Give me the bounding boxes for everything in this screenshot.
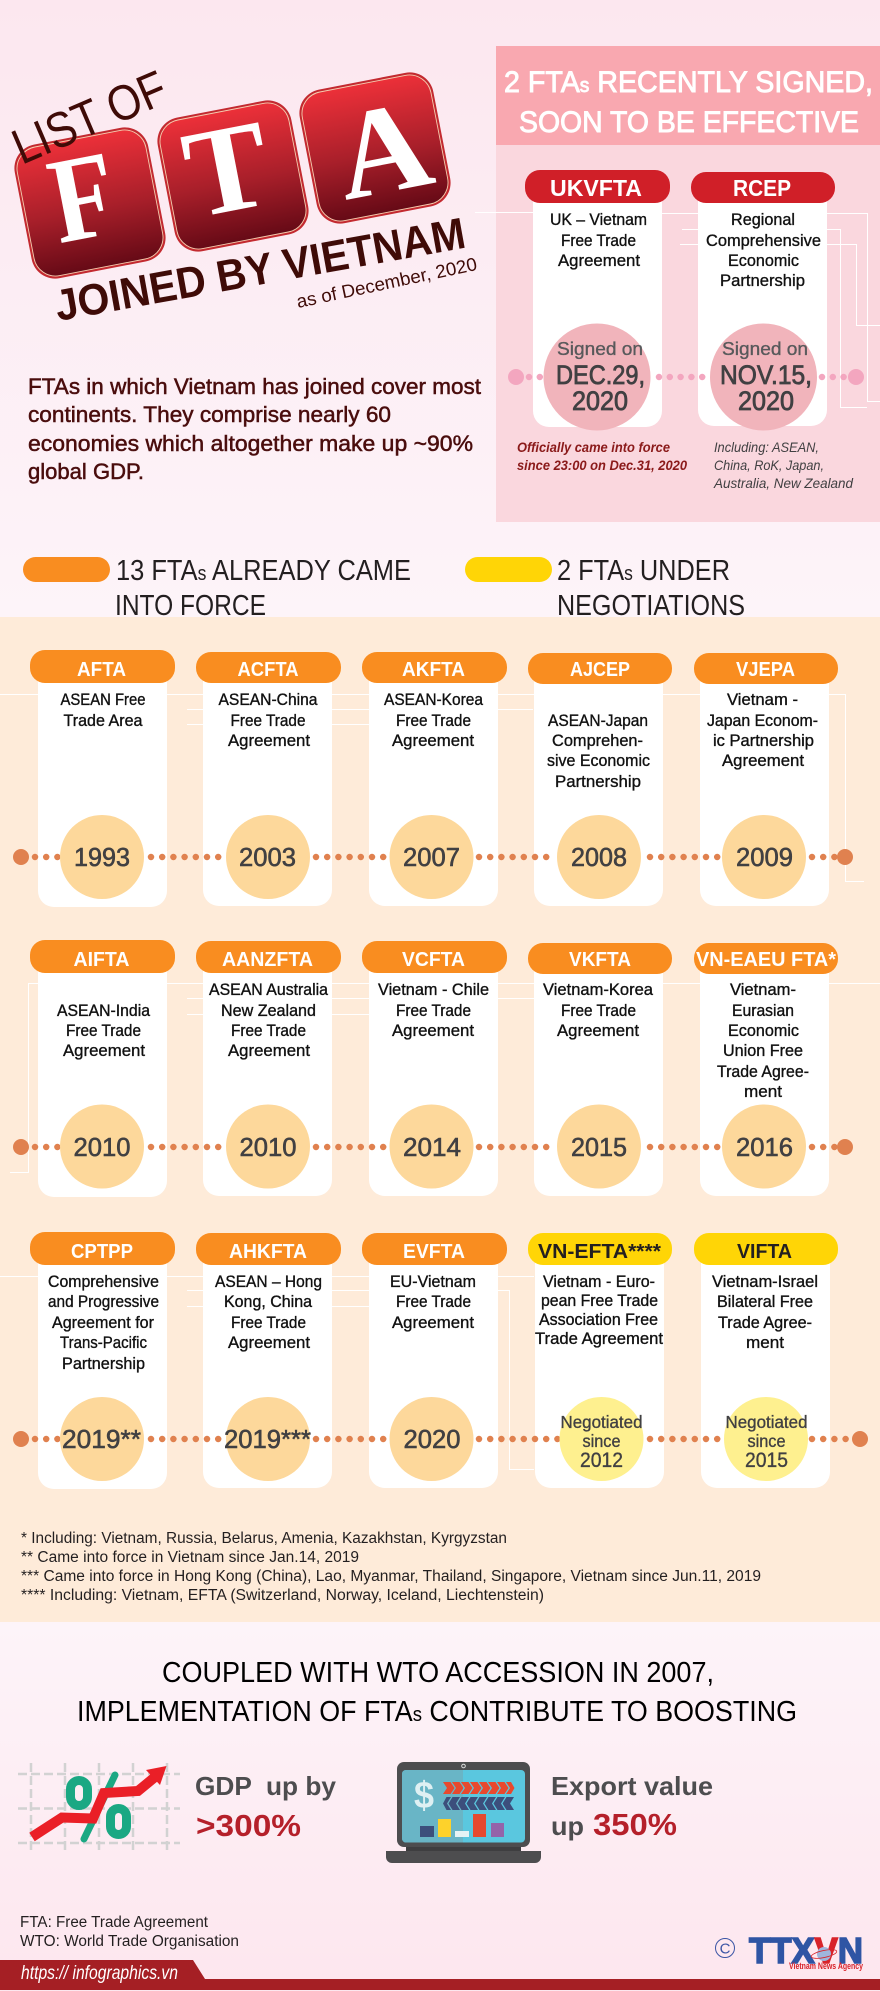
year badges: row 3: 2019** (62, 1424, 141, 1454)
card: VN-EAEU FTA: Trade Agree- (717, 1063, 809, 1081)
card: VJEPA: Vietnam - (727, 691, 798, 709)
card: VKFTA: Agreement (557, 1022, 639, 1040)
year badges: row 3: Negotiated (726, 1412, 808, 1432)
panel heading band: 2 FTAs RECENTLY SIGNED, (504, 66, 873, 99)
card: AIFTA: Free Trade (66, 1022, 141, 1040)
year badges: row 2: 2014 (403, 1132, 461, 1162)
card: VIFTA (694, 1233, 838, 1488)
footnotes: *** Came into force in Hong Kong (China), Lao, Myanmar, Thailand, Singapore, Vietnam since Jun.11, 2019 (21, 1568, 761, 1585)
card: EVFTA (362, 1233, 507, 1488)
footnotes: ** Came into force in Vietnam since Jan.14, 2019 (21, 1549, 359, 1566)
year badges: row 3: Negotiated (560, 1412, 642, 1432)
stat: GDP: GDP up by (195, 1771, 337, 1801)
card: AIFTA: Agreement (63, 1042, 145, 1060)
card: RCEP: Economic (728, 252, 799, 270)
card: VKFTA: VKFTA (569, 948, 631, 971)
date badge: Dec 29 2020: 2020 (572, 386, 628, 416)
card: AANZFTA: ASEAN Australia (209, 981, 329, 999)
year badges: row 1: 2008 (571, 842, 627, 872)
stat: export value: up (551, 1811, 584, 1841)
year badges: row 1: 1993 (74, 842, 130, 872)
card: RCEP: Regional (731, 211, 795, 229)
intro text block (28, 374, 481, 484)
card: RCEP: RCEP (733, 175, 791, 201)
year badges: row 1: 2007 (403, 842, 460, 872)
card: EVFTA: Agreement (392, 1314, 474, 1332)
card: VN-EAEU FTA: ment (744, 1083, 782, 1101)
note: came into force: Officially came into force (517, 439, 670, 455)
card: AKFTA: AKFTA (402, 658, 465, 681)
card: AHKFTA: Free Trade (231, 1314, 306, 1332)
card: VCFTA: VCFTA (402, 948, 465, 971)
logo: TTXVN: TTXVN (749, 1930, 863, 1971)
logo: TTXVN: C (720, 1940, 731, 1958)
card: VN-EAEU FTA (694, 943, 838, 1196)
timeline: signing dates (508, 369, 864, 385)
card: AANZFTA: New Zealand (221, 1002, 316, 1020)
heading: Joined by Vietnam: JOINED BY VIETNAM (51, 209, 469, 331)
card: AKFTA (362, 652, 507, 906)
intro text block: economies which altogether make up ~90% (28, 431, 473, 456)
legend: under negotiations: NEGOTIATIONS (557, 590, 745, 622)
date badge: Nov 15 2020: Signed on (722, 338, 808, 359)
card: UKVFTA: Free Trade (561, 232, 636, 250)
card: VN-EFTA: Association Free (539, 1311, 658, 1329)
panel background (496, 46, 880, 522)
card: AFTA: ASEAN Free (60, 691, 146, 709)
year badges: row 1: 2003 (239, 842, 296, 872)
card: AFTA (30, 650, 175, 907)
year badges: row 2: 2015 (571, 1132, 627, 1162)
card: CPTPP: Agreement for (52, 1314, 154, 1332)
glossary: FTA: Free Trade Agreement (20, 1914, 209, 1931)
card: EVFTA: EVFTA (403, 1240, 465, 1263)
card: AANZFTA: AANZFTA (222, 948, 313, 971)
date badge: Dec 29 2020: DEC.29, (556, 360, 645, 390)
year badges: row 3: 2020 (404, 1424, 460, 1454)
year badges: row 2: 2016 (736, 1132, 793, 1162)
note: RCEP members: Including: ASEAN, (714, 439, 819, 455)
card: VN-EAEU FTA: Vietnam- (730, 981, 796, 999)
icon: laptop with export chart: $ (414, 1775, 434, 1817)
date: as of December 2020: as of December, 2020 (294, 253, 479, 312)
card: VJEPA: ic Partnership (713, 732, 814, 750)
legend: in force: INTO FORCE (115, 590, 266, 622)
background: top (0, 0, 880, 617)
date badge: Nov 15 2020: NOV.15, (720, 360, 812, 390)
stat: GDP: >300% (196, 1808, 301, 1843)
card: VIFTA: ment (746, 1334, 784, 1352)
card: AANZFTA: Agreement (228, 1042, 310, 1060)
card: UKVFTA (525, 170, 670, 427)
year badges: row 2 (60, 1104, 806, 1188)
year badges: row 3: 2019*** (224, 1424, 311, 1454)
card: ACFTA (196, 652, 341, 906)
note: RCEP members: Australia, New Zealand (713, 475, 854, 491)
card: VKFTA (528, 943, 672, 1196)
card: VN-EFTA: Vietnam - Euro- (543, 1273, 655, 1291)
card: RCEP: Comprehensive (706, 232, 821, 250)
card: RCEP: Partnership (720, 272, 805, 290)
note: RCEP members (713, 439, 854, 491)
date badge: Nov 15 2020 (710, 324, 817, 430)
stat: export value (551, 1771, 713, 1842)
date badge: Dec 29 2020: Signed on (557, 338, 643, 359)
card: CPTPP: Partnership (62, 1355, 145, 1373)
card: VN-EFTA: VN-EFTA**** (538, 1240, 661, 1263)
tile: T: T (173, 94, 281, 246)
card: AIFTA: ASEAN-India (57, 1002, 151, 1020)
stat: export value: 350% (593, 1807, 677, 1842)
background: bottom (0, 1622, 880, 1991)
note: came into force: since 23:00 on Dec.31, 2020 (517, 457, 687, 473)
timeline: row 2 (13, 1139, 853, 1155)
card: VIFTA: VIFTA (737, 1240, 792, 1263)
intro text block: continents. They comprise nearly 60 (28, 402, 391, 427)
card: AFTA: AFTA (77, 658, 126, 681)
date badge: Nov 15 2020: 2020 (738, 386, 794, 416)
card: VKFTA: Vietnam-Korea (543, 981, 654, 999)
glossary (20, 1914, 239, 1950)
card: AKFTA: Agreement (392, 732, 474, 750)
tile: F (10, 123, 170, 283)
year badges: row 3: since (748, 1431, 786, 1451)
card: UKVFTA: UK – Vietnam (550, 211, 647, 229)
card: RCEP (691, 172, 835, 426)
icon: laptop with export chart (386, 1762, 541, 1863)
timeline: row 1 (13, 849, 853, 865)
legend: under negotiations (465, 555, 745, 622)
card: VN-EFTA (528, 1233, 672, 1488)
card: AHKFTA: ASEAN – Hong (215, 1273, 322, 1291)
panel: recently signed FTAs (475, 46, 880, 522)
card: UKVFTA: Agreement (558, 252, 640, 270)
card: VCFTA: Vietnam - Chile (378, 981, 489, 999)
footnotes (21, 1530, 761, 1604)
heading: WTO accession: IMPLEMENTATION OF FTAs CONTRIBUTE TO BOOSTING (77, 1696, 797, 1728)
card: AFTA: Trade Area (64, 712, 143, 730)
card: VCFTA: Agreement (392, 1022, 474, 1040)
card: ACFTA: ASEAN-China (218, 691, 318, 709)
card: AANZFTA (196, 941, 341, 1196)
card: AJCEP: sive Economic (547, 752, 650, 770)
card: VN-EAEU FTA: Union Free (723, 1042, 803, 1060)
row 1 cards (30, 650, 838, 907)
card: CPTPP: and Progressive (48, 1293, 159, 1311)
card: CPTPP: CPTPP (71, 1240, 133, 1263)
legend: in force: 13 FTAs ALREADY CAME (116, 555, 411, 587)
card: CPTPP (30, 1232, 175, 1489)
card: AIFTA (30, 940, 175, 1197)
footer band: https:// infographics.vn (21, 1963, 178, 1984)
heading: WTO accession: COUPLED WITH WTO ACCESSION IN 2007, (162, 1657, 714, 1689)
card: ACFTA: Agreement (228, 732, 310, 750)
footnotes: **** Including: Vietnam, EFTA (Switzerland, Norway, Iceland, Liechtenstein) (21, 1587, 544, 1604)
panel heading band: SOON TO BE EFFECTIVE (519, 106, 859, 139)
date badge: Dec 29 2020 (544, 324, 650, 430)
card: AJCEP: ASEAN-Japan (548, 712, 648, 730)
card: VCFTA: Free Trade (396, 1002, 471, 1020)
year badges: row 1 (60, 815, 806, 899)
stat: export value: Export value (551, 1771, 713, 1801)
legend: under negotiations: 2 FTAs UNDER (557, 555, 730, 587)
card: ACFTA: ACFTA (238, 658, 299, 681)
card: VN-EFTA: pean Free Trade (541, 1292, 658, 1310)
card: AHKFTA (196, 1233, 341, 1488)
panel heading band (496, 46, 880, 145)
card: ACFTA: Free Trade (230, 712, 306, 730)
heading: WTO accession (77, 1657, 797, 1728)
panel: timeline background (0, 617, 880, 1622)
heading: List of: LIST OF (4, 60, 175, 175)
card: EVFTA: Free Trade (396, 1293, 471, 1311)
card: CPTPP: Trans-Pacific (60, 1334, 147, 1352)
card: VKFTA: Free Trade (561, 1002, 636, 1020)
card: AIFTA: AIFTA (74, 948, 130, 971)
row 2 cards (30, 940, 838, 1197)
note: came into force (517, 439, 687, 473)
card: VJEPA: VJEPA (736, 658, 795, 681)
card: AHKFTA: AHKFTA (229, 1240, 307, 1263)
year badges: row 3: 2015 (745, 1449, 788, 1472)
card: AKFTA: ASEAN-Korea (384, 691, 484, 709)
note: RCEP members: China, RoK, Japan, (714, 457, 824, 473)
card: VIFTA: Bilateral Free (717, 1293, 813, 1311)
card: VJEPA (694, 653, 838, 906)
card: VN-EAEU FTA: VN-EAEU FTA* (696, 948, 836, 971)
year badges: row 3: since (582, 1431, 620, 1451)
card: VJEPA: Japan Econom- (707, 712, 818, 730)
year badges: row 2: 2010 (74, 1132, 130, 1162)
tile: A: A (324, 73, 443, 228)
card: AANZFTA: Free Trade (231, 1022, 306, 1040)
legend: in force (23, 555, 411, 622)
card: AHKFTA: Kong, China (224, 1293, 313, 1311)
card: VJEPA: Agreement (722, 752, 804, 770)
card: AKFTA: Free Trade (396, 712, 471, 730)
intro text block: global GDP. (28, 459, 144, 484)
card: CPTPP: Comprehensive (48, 1273, 159, 1291)
stat: GDP (195, 1771, 337, 1843)
tile: T (153, 94, 313, 256)
card: AJCEP: Comprehen- (552, 732, 643, 750)
card: AJCEP: Partnership (555, 773, 641, 791)
card: VN-EAEU FTA: Economic (728, 1022, 799, 1040)
card: AJCEP: AJCEP (570, 658, 630, 681)
card: VIFTA: Trade Agree- (718, 1314, 812, 1332)
card: AHKFTA: Agreement (228, 1334, 310, 1352)
intro text block: FTAs in which Vietnam has joined cover most (28, 374, 481, 399)
card: UKVFTA: UKVFTA (550, 175, 642, 201)
year badges: row 2: 2010 (240, 1132, 296, 1162)
card: VIFTA: Vietnam-Israel (712, 1273, 818, 1291)
year badges: row 3: 2012 (580, 1449, 623, 1472)
card: AJCEP (528, 653, 672, 906)
glossary: WTO: World Trade Organisation (20, 1933, 239, 1950)
card: VN-EAEU FTA: Eurasian (732, 1002, 794, 1020)
icon: GDP growth percent chart (18, 1763, 180, 1854)
year badges: row 3 (60, 1397, 808, 1481)
card: EVFTA: EU-Vietnam (390, 1273, 476, 1291)
card: VCFTA (362, 941, 507, 1196)
timeline: row 3 (13, 1431, 868, 1447)
tile: F: F (39, 125, 127, 270)
title block: List of FTA joined by Vietnam (4, 60, 479, 331)
footer band (0, 1960, 880, 1990)
card: VN-EFTA: Trade Agreement (535, 1330, 663, 1348)
year badges: row 1: 2009 (736, 842, 793, 872)
footnotes: * Including: Vietnam, Russia, Belarus, Amenia, Kazakhstan, Kyrgyzstan (21, 1530, 507, 1547)
row 3 cards (30, 1232, 838, 1489)
